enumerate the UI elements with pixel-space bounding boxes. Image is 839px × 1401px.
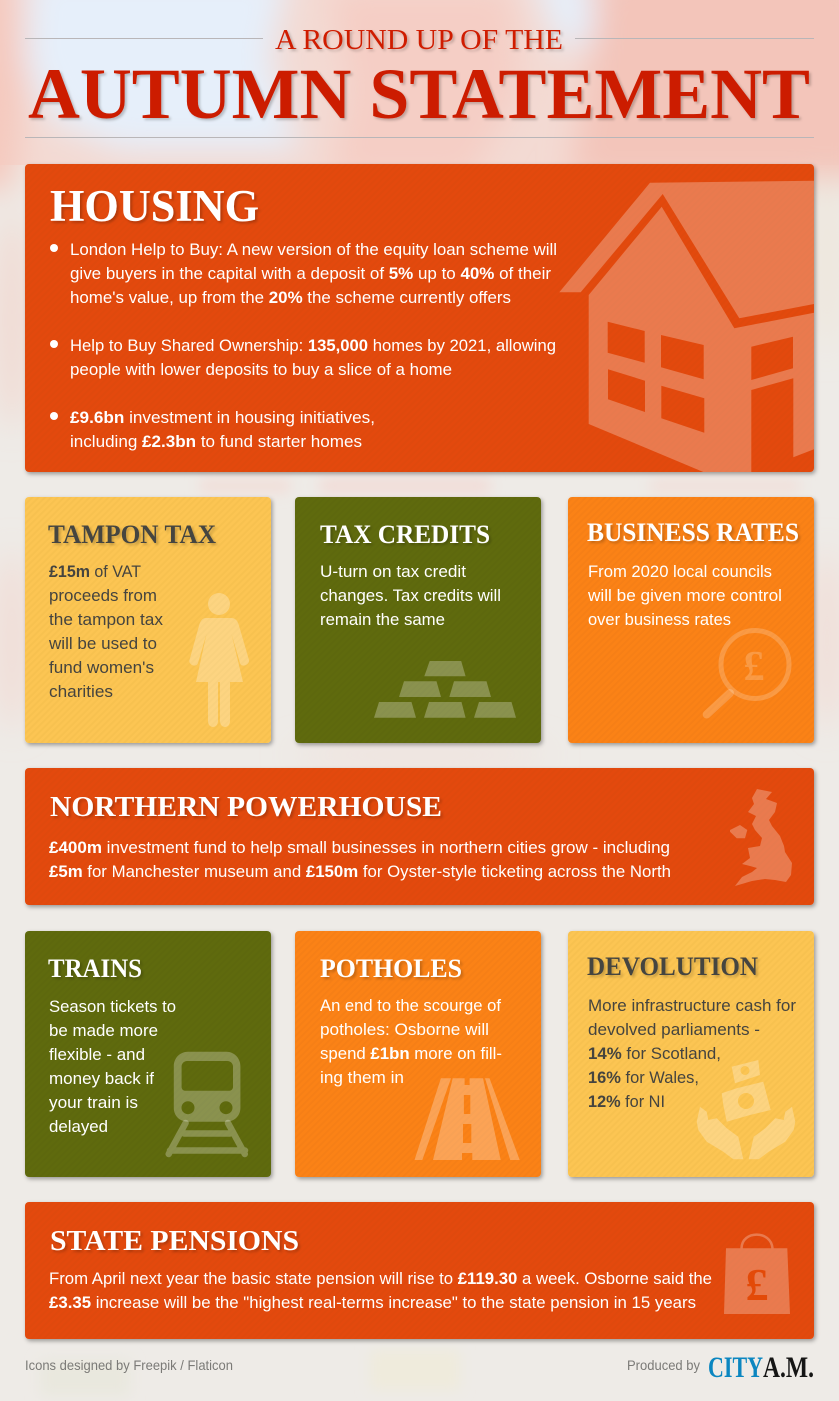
- panel: housing: [25, 164, 814, 472]
- housing bullet one: [50, 240, 557, 307]
- state pensions heading: STATE PENSIONS: [50, 1226, 299, 1257]
- northern powerhouse text: [49, 838, 671, 881]
- devolution text: 16% for Wales,: [588, 1068, 699, 1087]
- tax credits background: [295, 497, 541, 743]
- housing panel background: [25, 164, 814, 472]
- trains text: delayed: [49, 1117, 108, 1136]
- trains text: [49, 997, 176, 1136]
- housing heading: HOUSING: [50, 181, 259, 231]
- trains text: Season tickets to: [49, 997, 176, 1016]
- panel: devolution: [568, 931, 814, 1177]
- tampon tax text: proceeds from: [49, 586, 157, 605]
- produced by: Produced by: [627, 1357, 700, 1373]
- title line two: AUTUMN STATEMENT: [28, 54, 810, 134]
- business rates text: over business rates: [588, 610, 731, 629]
- footer: [25, 1351, 814, 1384]
- logo: City A.M.: A.M.: [763, 1351, 814, 1384]
- business rates background: [568, 497, 814, 743]
- icon: house: [559, 181, 814, 472]
- potholes text: ing them in: [320, 1068, 404, 1087]
- tampon tax text: [48, 562, 163, 701]
- panel: potholes: [295, 931, 541, 1177]
- tampon tax background: [25, 497, 271, 743]
- northern powerhouse background: [25, 768, 814, 905]
- housing bullet one: London Help to Buy: A new version of the equity loan scheme will: [70, 240, 557, 259]
- trains text: be made more: [49, 1021, 158, 1040]
- tampon tax text: will be used to: [48, 634, 157, 653]
- icon: road: [414, 1078, 520, 1160]
- state pensions text: From April next year the basic state pension will rise to £119.30 a week. Osborne said the: [49, 1269, 712, 1288]
- tax credits text: U-turn on tax credit: [320, 562, 466, 581]
- panel: northern powerhouse: [25, 768, 814, 905]
- icon: shopping bag with pound: £: [746, 1259, 768, 1310]
- northern powerhouse heading: NORTHERN POWERHOUSE: [50, 792, 442, 823]
- icon: shopping bag with pound: [724, 1235, 790, 1314]
- housing bullet three: £9.6bn investment in housing initiatives,: [70, 408, 375, 427]
- trains text: flexible - and: [49, 1045, 145, 1064]
- devolution text: devolved parliaments -: [588, 1020, 760, 1039]
- business rates text: From 2020 local councils: [588, 562, 772, 581]
- housing bullet three: including £2.3bn to fund starter homes: [70, 432, 362, 451]
- state pensions background: [25, 1202, 814, 1339]
- housing bullet two: Help to Buy Shared Ownership: 135,000 homes by 2021, allowing: [70, 336, 556, 355]
- icon: train: [169, 1052, 245, 1154]
- tampon tax heading: TAMPON TAX: [48, 520, 216, 549]
- devolution background: [568, 931, 814, 1177]
- tampon tax text: charities: [49, 682, 113, 701]
- panel: tax credits: [295, 497, 541, 743]
- business rates text: will be given more control: [587, 586, 782, 605]
- panel: state pensions: [25, 1202, 814, 1339]
- potholes text: An end to the scourge of: [320, 996, 501, 1015]
- potholes text: [320, 996, 502, 1087]
- tax credits heading: TAX CREDITS: [320, 520, 490, 549]
- housing bullet one: home's value, up from the 20% the scheme currently offers: [70, 288, 511, 307]
- housing bullet two: [50, 336, 556, 379]
- state pensions text: [49, 1269, 712, 1312]
- panel: business rates: [568, 497, 814, 743]
- title rule lines: [25, 38, 814, 138]
- icon: magnifying glass: [707, 630, 789, 714]
- northern powerhouse text: £400m investment fund to help small businesses in northern cities grow - including: [49, 838, 670, 857]
- housing bullet two: people with lower deposits to buy a slice of a home: [70, 360, 452, 379]
- northern powerhouse text: £5m for Manchester museum and £150m for Oyster-style ticketing across the North: [49, 862, 671, 881]
- trains heading: TRAINS: [48, 954, 142, 983]
- tampon tax text: fund women's: [49, 658, 154, 677]
- icon: gold bars: [374, 661, 516, 718]
- title line one: A ROUND UP OF THE: [275, 24, 563, 56]
- trains text: money back if: [49, 1069, 154, 1088]
- potholes background: [295, 931, 541, 1177]
- housing bullet three: [50, 408, 375, 451]
- icon credit: Icons designed by Freepik / Flaticon: [25, 1357, 233, 1373]
- devolution text: More infrastructure cash for: [588, 996, 796, 1015]
- panel: tampon tax: [25, 497, 271, 743]
- housing bullet one: give buyers in the capital with a deposit of 5% up to 40% of their: [70, 264, 551, 283]
- icon: woman: [189, 593, 249, 727]
- icon: UK map: [730, 789, 792, 886]
- devolution text: 12% for NI: [588, 1092, 665, 1111]
- panel: trains: [25, 931, 271, 1177]
- tampon tax text: £15m of VAT: [49, 562, 141, 581]
- tax credits text: [320, 562, 501, 629]
- potholes text: potholes: Osborne will: [320, 1020, 489, 1039]
- devolution text: 14% for Scotland,: [588, 1044, 721, 1063]
- trains text: your train is: [49, 1093, 138, 1112]
- potholes heading: POTHOLES: [320, 954, 462, 983]
- icon: magnifying glass: £: [744, 644, 764, 690]
- title: [25, 24, 814, 138]
- state pensions text: £3.35 increase will be the "highest real-terms increase" to the state pension in 15 years: [49, 1293, 696, 1312]
- tax credits text: changes. Tax credits will: [320, 586, 501, 605]
- logo: City A.M.: CITY: [708, 1351, 763, 1384]
- devolution text: [588, 996, 796, 1111]
- trains background: [25, 931, 271, 1177]
- business rates heading: BUSINESS RATES: [587, 518, 799, 547]
- business rates text: [587, 562, 782, 629]
- potholes text: spend £1bn more on fill-: [320, 1044, 502, 1063]
- devolution heading: DEVOLUTION: [587, 952, 758, 981]
- tampon tax text: the tampon tax: [49, 610, 163, 629]
- icon: hands with money: [697, 1060, 795, 1159]
- tax credits text: remain the same: [320, 610, 445, 629]
